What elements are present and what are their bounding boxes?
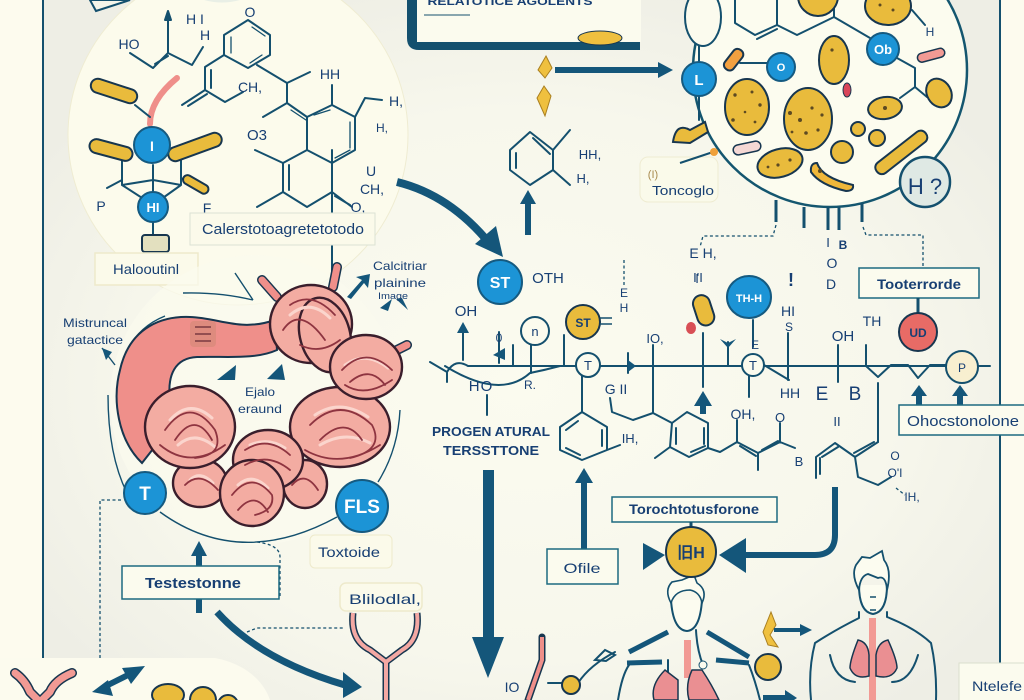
panel: gut organ: eraund bbox=[238, 402, 282, 416]
label: Ofile: Ofile bbox=[564, 560, 601, 576]
chain text labels: I bbox=[695, 271, 699, 286]
center-top molecule: HH, bbox=[579, 147, 601, 162]
panel: gut organ: gatactice bbox=[67, 333, 123, 347]
center-top molecule bbox=[510, 130, 601, 235]
node: yellow HH: 旧H bbox=[677, 544, 705, 562]
panel: top heading box bbox=[407, 0, 641, 50]
chemical labels bbox=[96, 4, 403, 216]
label: Toxtoide: Toxtoide bbox=[318, 544, 380, 560]
node: ST blue bbox=[478, 260, 522, 304]
chain text labels: O bbox=[827, 255, 838, 271]
figure: man left bbox=[618, 575, 760, 700]
panel: top-right cell circle: L bbox=[694, 72, 704, 89]
intestine folds bbox=[145, 285, 402, 526]
chain text labels: E bbox=[751, 338, 759, 352]
chain text labels: IH, bbox=[904, 490, 920, 504]
panel: top-left molecule circle bbox=[68, 0, 408, 307]
capsule and red dot bbox=[686, 293, 717, 334]
chain text labels: OH bbox=[455, 303, 477, 320]
node: TH-H blue: TH-H bbox=[736, 293, 762, 305]
bottom tube and coin: IO bbox=[505, 679, 519, 695]
label: Toncoglo: Toncoglo bbox=[652, 183, 714, 198]
node: ST blue: ST bbox=[490, 275, 510, 292]
chain text labels: HO bbox=[469, 378, 493, 395]
panel: top-right cell circle: H ? bbox=[908, 174, 942, 199]
figure: man right bbox=[810, 551, 936, 700]
heading: Progen atural tersstone bbox=[432, 425, 550, 458]
icon: pink Y organ bbox=[353, 613, 417, 700]
icon: document corner bbox=[90, 0, 130, 11]
label: Torochtotusforone bbox=[612, 497, 777, 530]
molecular node diagram: HI bbox=[146, 200, 160, 215]
chain text labels: O bbox=[775, 410, 785, 425]
dashed connectors left bbox=[100, 500, 280, 658]
chemical labels: U bbox=[366, 163, 376, 179]
large curved arrow to ST bbox=[397, 182, 503, 257]
node: ST yellow bbox=[566, 305, 612, 339]
label: Testosterone: Testestonne bbox=[145, 575, 241, 592]
panel: gut organ bbox=[63, 255, 427, 545]
node: T chain left bbox=[576, 353, 600, 377]
node: n white bbox=[521, 317, 549, 345]
node: red UD: UD bbox=[909, 326, 927, 340]
label: Calerstotoagretetotodo bbox=[190, 213, 375, 245]
ticks below circle bbox=[776, 200, 862, 230]
center-top molecule: H, bbox=[576, 171, 590, 186]
chain text labels: O bbox=[890, 449, 900, 463]
chain text labels: E H, bbox=[689, 245, 717, 261]
node: red UD bbox=[899, 313, 937, 351]
H circle bbox=[900, 157, 950, 207]
label: Calerstotoagretetotodo: Calerstotoagretetotodo bbox=[202, 221, 364, 238]
label: Tooterrorde: Tooterrorde bbox=[877, 276, 961, 292]
chain text labels: B bbox=[839, 238, 848, 252]
label: Ohocstonolone bbox=[899, 385, 1024, 435]
arrowheads and labels inside gut bbox=[217, 274, 408, 380]
chemical labels: H, bbox=[389, 93, 403, 109]
node: TH-H blue bbox=[727, 276, 771, 318]
node: P beige: P bbox=[958, 361, 966, 375]
chain text labels: HH bbox=[780, 385, 800, 401]
chemical labels: CH, bbox=[360, 181, 384, 197]
panel: top-right cell circle bbox=[640, 0, 967, 267]
T node bbox=[124, 472, 166, 514]
chain text labels: OTH bbox=[532, 270, 564, 287]
chemical labels: O3 bbox=[247, 127, 267, 144]
chain text labels: TH bbox=[863, 313, 881, 329]
panel: gut organ: T bbox=[139, 484, 151, 505]
icon: yellow flames bbox=[537, 56, 552, 116]
chemical labels: H, bbox=[376, 121, 388, 135]
label: Bilodial: Blilodlal, bbox=[349, 591, 421, 607]
chain text labels: B bbox=[795, 454, 803, 469]
connector arrow into yellow node bbox=[643, 487, 835, 573]
label: Ohocstonolone: Ohocstonolone bbox=[907, 413, 1019, 430]
chemical labels: O bbox=[245, 4, 256, 20]
bottom tube and coin bbox=[505, 637, 615, 700]
oval ring bbox=[685, 0, 721, 46]
chemical labels: HO bbox=[118, 36, 140, 52]
chain text labels: 0 bbox=[496, 331, 503, 345]
chain text labels bbox=[455, 235, 920, 504]
arrow: to top-right circle bbox=[555, 62, 673, 78]
arrow: up to hexagon bbox=[575, 468, 593, 550]
chemical labels: O, bbox=[351, 199, 365, 215]
node: yellow HH bbox=[666, 527, 716, 577]
chain text labels: G II bbox=[605, 381, 627, 397]
heading: Progen atural tersstone: TERSSTTONE bbox=[443, 444, 539, 458]
node: ST yellow: ST bbox=[575, 316, 591, 330]
small molecule bbox=[130, 11, 203, 68]
panel: gut organ: Image bbox=[378, 291, 408, 301]
node: T chain right: T bbox=[749, 358, 757, 373]
chain text labels: B bbox=[849, 384, 861, 405]
panel: gut organ: FLS bbox=[344, 497, 380, 518]
label: Halooutinl bbox=[95, 253, 198, 285]
chemical labels: H I bbox=[186, 11, 204, 27]
cell molecule lines bbox=[699, 0, 927, 120]
lower molecule bbox=[560, 398, 891, 485]
organelle spots bbox=[731, 4, 894, 173]
chain text labels: OH, bbox=[731, 406, 755, 422]
chemical labels: F bbox=[203, 200, 211, 216]
chain text labels: HI bbox=[781, 303, 795, 319]
chain text labels: ! bbox=[788, 270, 794, 290]
gut nubs bbox=[262, 267, 407, 352]
chain text labels: S bbox=[785, 320, 793, 334]
node: T chain right bbox=[742, 354, 764, 376]
panel: gut organ: plainine bbox=[374, 276, 426, 290]
chain text labels: E bbox=[620, 286, 628, 300]
chemical labels: P bbox=[96, 198, 106, 214]
main chain bbox=[430, 235, 990, 504]
chemical labels: H bbox=[200, 27, 210, 43]
blue nodes bbox=[682, 62, 716, 96]
chemical labels: CH, bbox=[238, 79, 262, 95]
node: n white: n bbox=[531, 324, 539, 339]
heading: Progen atural tersstone: PROGEN ATURAL bbox=[432, 425, 550, 439]
node: T chain left: T bbox=[584, 358, 592, 373]
label: Halooutinl: Halooutinl bbox=[113, 261, 179, 277]
panel: gut organ: Mistruncal bbox=[63, 316, 127, 330]
molecular node diagram bbox=[88, 77, 224, 252]
label: Ofile bbox=[547, 549, 618, 584]
chain text labels: I bbox=[826, 235, 830, 250]
icon: flame and arrow between men bbox=[755, 612, 812, 680]
steroid rings bbox=[182, 20, 382, 307]
node: P beige bbox=[946, 351, 978, 383]
chain text labels: I'I bbox=[693, 270, 703, 285]
label: Toncoglo: (I) bbox=[648, 169, 658, 181]
label: Toncoglo bbox=[648, 169, 714, 198]
label: Bilodial bbox=[340, 583, 422, 611]
chain text labels: H bbox=[620, 301, 628, 315]
label: Tooterrorde bbox=[859, 268, 979, 315]
label: Testosterone bbox=[122, 541, 279, 613]
panel: gut organ: Calcitriar bbox=[373, 259, 427, 273]
arrow: big down bbox=[472, 470, 504, 678]
label: Torochtotusforone: Torochtotusforone bbox=[629, 502, 760, 517]
panel: top-right cell circle: Ob bbox=[874, 42, 892, 57]
arrow: man left to right bbox=[763, 690, 797, 700]
molecular node diagram: I bbox=[150, 138, 154, 154]
chain text labels: IH, bbox=[622, 431, 638, 446]
chain text labels: II bbox=[833, 414, 841, 429]
curved arrow to bilodial bbox=[217, 612, 362, 698]
label: Nutrients box: Ntelefe bbox=[972, 678, 1022, 694]
label: Toxtoide bbox=[310, 535, 392, 568]
label: Nutrients box bbox=[959, 663, 1024, 700]
chain text labels: O'I bbox=[888, 466, 902, 480]
FLS node bbox=[336, 480, 388, 532]
organelles bbox=[673, 0, 957, 191]
chain text labels: D bbox=[826, 276, 836, 292]
panel: gut organ: Ejalo bbox=[245, 385, 275, 399]
panel: bottom-left bbox=[0, 658, 270, 700]
chemical labels: HH bbox=[320, 66, 340, 82]
chain text labels: OH bbox=[832, 328, 854, 345]
chain text labels: E bbox=[816, 384, 828, 405]
chain text labels: IO, bbox=[646, 331, 664, 346]
panel: top-right cell circle: O bbox=[777, 62, 786, 74]
chain text labels: R. bbox=[524, 378, 536, 392]
panel: top-right cell circle: H bbox=[926, 25, 934, 39]
arrow: up to chain bbox=[694, 391, 712, 414]
